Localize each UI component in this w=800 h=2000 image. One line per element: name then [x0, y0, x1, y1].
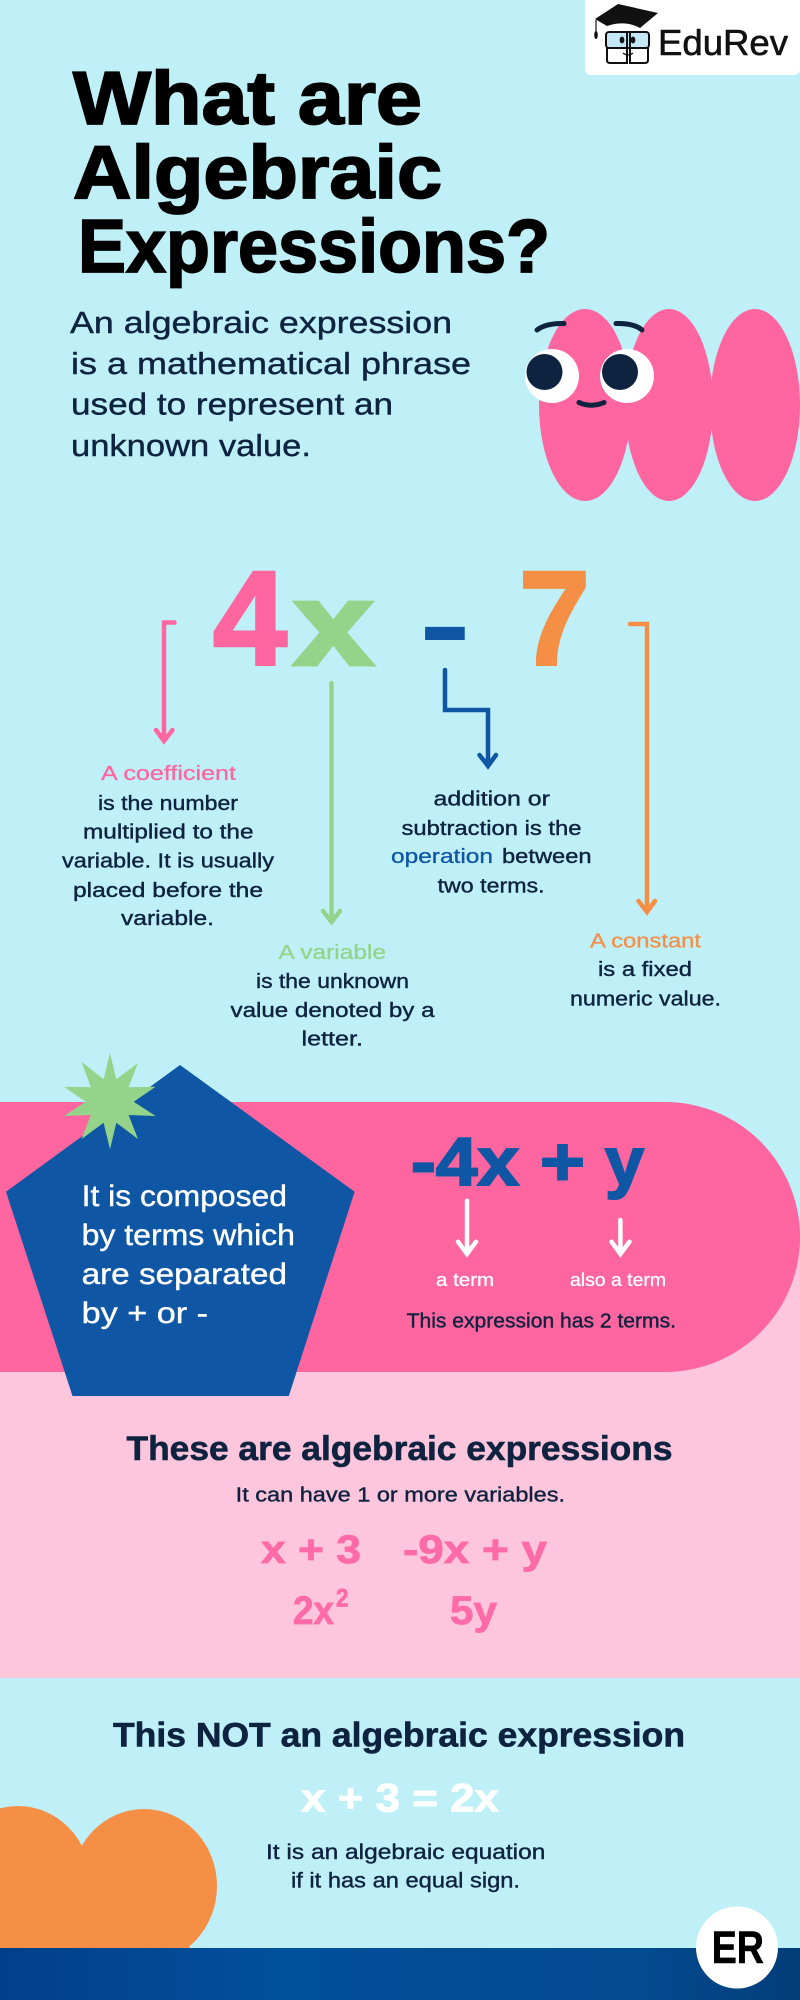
callout: coefficient: is the number — [98, 793, 238, 815]
pentagon: blue shape — [6, 1065, 355, 1396]
callout: constant: numeric value. — [570, 988, 721, 1010]
callout: operation: subtraction is the — [402, 818, 582, 840]
callout: variable: letter. — [302, 1029, 363, 1051]
intro paragraph: is a mathematical phrase — [71, 346, 471, 381]
examples of expressions: 2 — [336, 1585, 348, 1613]
callout: constant: is a fixed — [598, 959, 692, 981]
formula: 4x - 7: x — [294, 558, 373, 690]
title: Expressions? — [78, 204, 550, 288]
title: Algebraic — [73, 130, 442, 214]
callout: operation: operation — [391, 846, 493, 868]
panel: pink rounded band — [0, 1102, 800, 1372]
logo: EduRev — [585, 0, 800, 75]
equation: x + 3 = 2x: x + 3 = 2x — [301, 1777, 499, 1821]
heading: not an algebraic expression: This NOT an algebraic expression — [113, 1717, 685, 1755]
callout: variable: A variable — [278, 942, 386, 964]
label: also a term: also a term — [570, 1270, 666, 1290]
example expression: -4x + y — [411, 1124, 644, 1200]
title — [73, 56, 550, 288]
callout: coefficient: A coefficient — [101, 763, 237, 785]
text: equation note: if it has an equal sign. — [291, 1870, 520, 1893]
callout: variable: value denoted by a — [230, 1000, 436, 1022]
text: equation note: It is an algebraic equation — [266, 1841, 545, 1864]
title: What are — [73, 56, 422, 140]
examples of expressions: 5y — [450, 1589, 498, 1633]
footer bar — [0, 1948, 800, 2000]
heading: these are algebraic expressions: These are algebraic expressions — [126, 1430, 672, 1468]
callout: coefficient: variable. — [121, 908, 214, 930]
badge: ER: ER — [712, 1922, 764, 1973]
panel: light pink background — [0, 1237, 800, 1678]
callout: variable — [230, 942, 436, 1051]
intro paragraph: An algebraic expression — [70, 305, 452, 340]
formula: 4x - 7: 7 — [519, 544, 590, 694]
callout: operation: between — [502, 846, 592, 868]
callout: operation — [391, 789, 592, 898]
pentagon text: by terms which — [82, 1219, 295, 1252]
icon: mascot with graduation cap — [594, 4, 658, 63]
example expression: -4x + y: -4x — [411, 1124, 519, 1200]
pentagon text — [82, 1180, 295, 1330]
callout: operation: addition or — [434, 789, 550, 811]
badge: ER — [696, 1906, 778, 1988]
label: a term: a term — [436, 1270, 494, 1290]
intro paragraph — [70, 305, 471, 463]
pentagon text: are separated — [82, 1258, 287, 1291]
arrow: coefficient — [156, 622, 174, 741]
formula: 4x - 7: 4 — [213, 544, 287, 694]
arrow: operation — [445, 670, 496, 766]
callout: coefficient: multiplied to the — [83, 822, 254, 844]
icon: green star — [64, 1053, 156, 1149]
examples of expressions: 2x — [293, 1589, 334, 1633]
examples of expressions — [261, 1528, 548, 1633]
arrow: variable — [323, 683, 340, 922]
callout: coefficient — [62, 763, 274, 930]
intro paragraph: unknown value. — [71, 428, 311, 463]
intro paragraph: used to represent an — [71, 386, 393, 422]
orange heart shape — [0, 1806, 217, 1963]
arrow: first term — [458, 1201, 476, 1254]
pentagon text: by + or - — [82, 1297, 208, 1330]
example expression: -4x + y: + — [540, 1124, 585, 1200]
callout: operation: two terms. — [438, 876, 545, 898]
arrow: second term — [612, 1220, 630, 1254]
callout: constant: A constant — [590, 931, 702, 953]
pentagon text: It is composed — [82, 1180, 287, 1213]
logo wordmark: EduRev — [658, 22, 788, 63]
callout: constant — [570, 931, 721, 1010]
formula: 4x - 7 — [213, 544, 590, 694]
callout: variable: is the unknown — [256, 971, 409, 993]
text: equation note — [266, 1841, 545, 1893]
character: pink blob with face — [525, 309, 800, 501]
callout: coefficient: variable. It is usually — [62, 850, 274, 872]
example expression: -4x + y: y — [605, 1124, 644, 1200]
text: term count: This expression has 2 terms. — [407, 1311, 676, 1333]
text: variables note: It can have 1 or more variables. — [236, 1485, 565, 1507]
examples of expressions: -9x + y — [403, 1528, 548, 1572]
arrow: constant — [630, 624, 655, 912]
formula: 4x - 7: - — [419, 563, 471, 686]
examples of expressions: x + 3 — [261, 1528, 361, 1572]
callout: coefficient: placed before the — [73, 880, 263, 902]
